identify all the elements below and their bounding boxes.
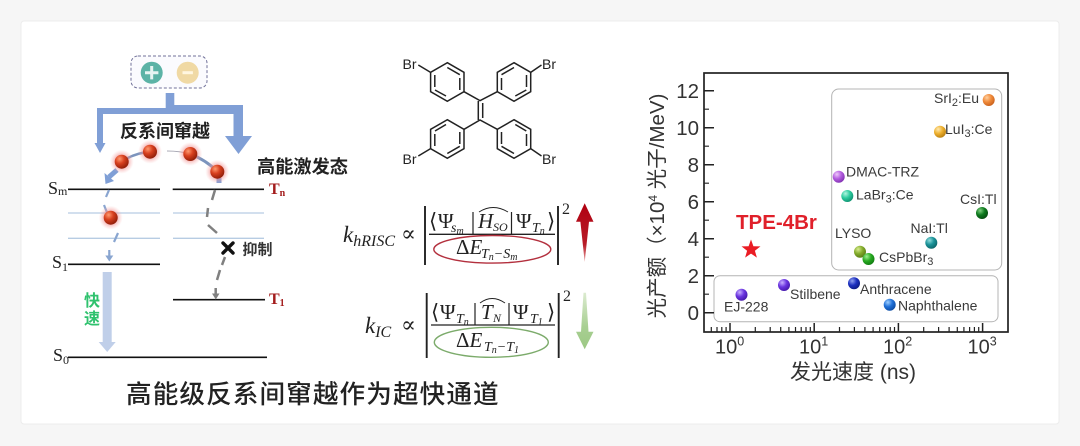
data labels: EJ-228 <box>724 299 769 315</box>
y axis tick labels: 2 <box>688 265 699 288</box>
formula: hRISC rate: ⟨ <box>429 209 437 233</box>
arrow: fast dashed path to S1 <box>104 190 118 262</box>
title: diagram caption: 高能级反系间窜越作为超快通道 <box>126 380 500 409</box>
ring: bottom left <box>431 120 464 158</box>
x axis tick labels: 1 <box>821 334 828 348</box>
x axis tick labels: 3 <box>990 334 997 348</box>
heading: high-energy excited state: 高能激发态 <box>257 156 348 177</box>
y axis tick labels: 8 <box>688 154 699 177</box>
labels: state names: S <box>53 345 63 365</box>
data points <box>736 94 995 311</box>
bromine labels: Br <box>542 56 556 72</box>
data labels: :Ce <box>892 186 914 202</box>
data labels: Stilbene <box>790 286 841 302</box>
formula: hRISC rate: −S <box>494 247 510 262</box>
labels: state names <box>48 178 286 367</box>
electrons: red spheres <box>99 140 229 230</box>
y axis tick labels <box>676 80 699 325</box>
bromine labels: Br <box>402 151 417 167</box>
formula: IC rate: 2 <box>563 288 571 305</box>
data labels: :Eu <box>958 90 979 106</box>
formula: IC rate: −T <box>497 340 515 355</box>
formula: hRISC rate: SO <box>493 220 508 234</box>
formula: hRISC rate: T <box>532 221 540 236</box>
x axis tick labels: 10 <box>715 336 737 358</box>
formula: IC rate: T <box>456 312 464 327</box>
arrow: fast emission <box>99 272 116 352</box>
data labels: :Ce <box>971 121 993 137</box>
formula: hRISC rate <box>343 201 570 265</box>
formula: hRISC rate: hRISC <box>353 233 395 250</box>
formula: IC rate: ΔE <box>456 328 483 352</box>
bromine labels: Br <box>402 56 417 72</box>
formula: hRISC rate: ∝ <box>401 221 416 246</box>
highlight label: TPE-4Br: TPE-4Br <box>736 211 817 234</box>
data labels: LYSO <box>835 225 871 241</box>
formula: hRISC rate: k <box>343 222 353 247</box>
highlight: red ellipse <box>434 236 551 263</box>
labels: state names: 1 <box>280 298 285 309</box>
data labels: LuI <box>945 121 964 137</box>
axes frame and ticks <box>704 73 1008 332</box>
formula: hRISC rate: s <box>451 221 456 236</box>
y axis tick labels: 0 <box>688 302 699 325</box>
formula: IC rate: 1 <box>514 345 519 356</box>
formula: IC rate: ⟩ <box>547 300 555 324</box>
formula: hRISC rate: 2 <box>562 201 570 218</box>
data labels: CsPbBr <box>879 249 927 265</box>
x axis tick labels: 10 <box>883 336 905 358</box>
ring: top right <box>497 63 531 101</box>
y axis tick labels: 12 <box>676 80 699 103</box>
arrow: green down <box>576 293 594 349</box>
labels: state names: n <box>280 188 286 199</box>
data labels: Anthracene <box>860 281 932 297</box>
labels: state names: S <box>48 178 58 198</box>
data labels <box>724 90 997 315</box>
data labels: 3 <box>927 256 933 268</box>
labels: state names: 1 <box>62 260 68 274</box>
formula: IC rate: T <box>484 340 492 355</box>
data labels: Naphthalene <box>898 298 978 314</box>
y axis tick labels: 6 <box>688 191 699 214</box>
formula: IC rate: N <box>492 311 502 325</box>
formula: hRISC rate: n <box>489 252 494 263</box>
formula: IC rate: Ψ <box>440 300 456 324</box>
panel: energy level diagram <box>48 56 348 367</box>
ring: bottom right <box>497 120 531 158</box>
formula: IC rate: T <box>530 312 538 327</box>
data labels: 3 <box>964 128 971 140</box>
x axis title: 发光速度 (ns) <box>790 361 916 384</box>
group box: organic scintillators <box>714 276 998 322</box>
data labels: LaBr <box>856 186 886 202</box>
x axis tick labels: 0 <box>737 334 744 348</box>
labels: state names: m <box>58 184 68 198</box>
highlight: green ellipse <box>434 327 548 357</box>
y axis title: 4 <box>646 195 660 202</box>
labels: state names: T <box>269 291 280 308</box>
formula: IC rate: k <box>365 313 375 338</box>
icon: suppression cross <box>223 243 233 253</box>
formula: hRISC rate: H <box>477 209 495 233</box>
formula: IC rate: n <box>464 317 469 328</box>
formula: IC rate: IC <box>374 324 392 341</box>
x axis tick labels: 10 <box>968 336 990 358</box>
x axis tick labels <box>715 334 997 358</box>
data labels: 3 <box>886 193 892 205</box>
ethylene core bonds <box>418 65 542 156</box>
bromine labels: Br <box>542 151 556 167</box>
label: fast: 快 <box>84 292 100 310</box>
arrow: suppressed internal conversion dashed path <box>207 190 225 300</box>
formula: IC rate: T <box>481 300 494 324</box>
y axis tick labels: 4 <box>688 228 699 251</box>
labels: state names: T <box>269 181 280 198</box>
chemical structure: TPE-4Br <box>402 56 556 167</box>
y axis title: 光子/MeV) <box>646 94 669 195</box>
bromine labels <box>402 56 556 167</box>
formula: hRISC rate: m <box>456 226 464 237</box>
x axis tick labels: 10 <box>799 336 821 358</box>
formula: hRISC rate: T <box>481 247 489 262</box>
formula: hRISC rate: Ψ <box>516 209 532 233</box>
ring: top left <box>431 63 464 101</box>
formula: IC rate <box>365 288 571 358</box>
chart: light yield vs decay time <box>646 73 1008 384</box>
label: fast <box>84 292 100 328</box>
data labels: 2 <box>952 97 958 109</box>
formula: IC rate: 1 <box>538 317 543 328</box>
labels: state names: S <box>52 252 62 272</box>
icon: charge carriers box <box>131 56 207 88</box>
data labels: NaI:Tl <box>910 220 948 236</box>
formula: hRISC rate: ⟩ <box>547 209 555 233</box>
energy levels: singlet and triplet lines <box>68 189 267 357</box>
formula: IC rate: Ψ <box>513 300 529 324</box>
formula: hRISC rate: m <box>510 252 517 263</box>
y axis tick labels: 10 <box>676 117 699 140</box>
data labels: CsI:Tl <box>960 191 997 207</box>
marker: star <box>742 240 760 258</box>
data labels: SrI <box>934 90 952 106</box>
x axis tick labels: 2 <box>905 334 912 348</box>
arrow: red up <box>576 203 594 262</box>
label: suppression: 抑制 <box>242 240 273 258</box>
data labels: DMAC-TRZ <box>846 164 920 180</box>
group box: inorganic and TADF scintillators <box>832 89 1002 270</box>
y axis title: 光产额（×10 <box>646 202 669 318</box>
formula: IC rate: ∝ <box>401 312 416 337</box>
formula: IC rate: n <box>492 345 497 356</box>
arrow: RISC path through electrons <box>104 151 219 184</box>
formula: IC rate: ⟨ <box>431 300 439 324</box>
formula: hRISC rate: ΔE <box>456 235 483 259</box>
heading: reverse intersystem crossing: 反系间窜越 <box>120 120 210 142</box>
label: fast: 速 <box>84 310 100 328</box>
arrow: branching exciton arrows <box>94 93 252 154</box>
formula: hRISC rate: Ψ <box>438 209 454 233</box>
formula: hRISC rate: n <box>540 226 545 237</box>
labels: state names: 0 <box>63 353 69 367</box>
